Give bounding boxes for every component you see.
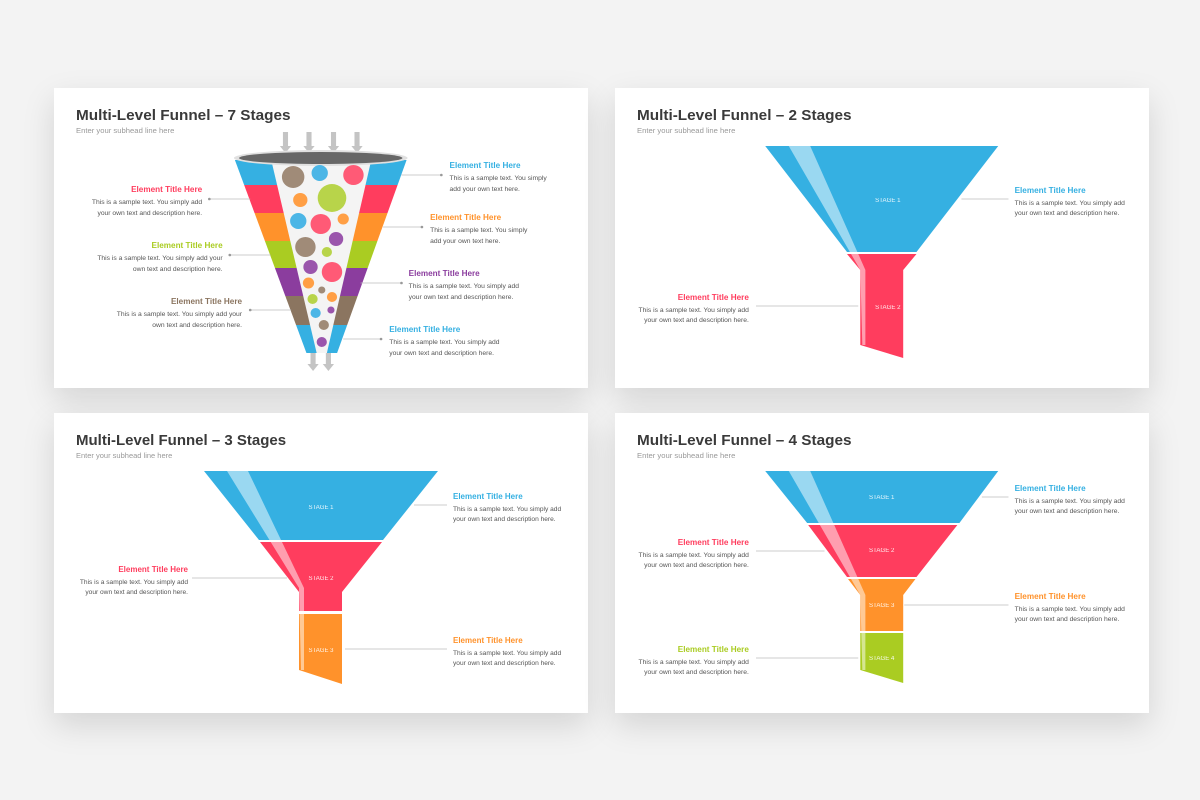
label left 2: Element Title Here — [152, 241, 223, 250]
label left: your own text and description here. — [85, 589, 188, 596]
panel: 2 stages — [615, 88, 1149, 388]
label left 2: your own text and description here. — [644, 669, 749, 676]
label right 4: This is a sample text. You simply add — [389, 339, 500, 346]
funnel 3 stages: STAGE 2 — [309, 576, 334, 582]
label left 2: own text and description here. — [133, 266, 223, 273]
label left 2 — [97, 241, 271, 273]
label left 3: Element Title Here — [171, 297, 243, 306]
label left: your own text and description here. — [644, 317, 749, 324]
title: Multi-Level Funnel – 7 Stages — [76, 107, 291, 124]
label right 1: Element Title Here — [453, 492, 523, 501]
title: Multi-Level Funnel – 4 Stages — [637, 432, 852, 449]
label right 1: add your own text here. — [450, 186, 520, 193]
label right: Element Title Here — [1015, 186, 1086, 195]
label left 1: This is a sample text. You simply add — [92, 199, 202, 206]
label left 1: Element Title Here — [678, 538, 749, 547]
label right 1 — [414, 492, 561, 523]
panel: 4 stages — [615, 413, 1149, 713]
label right 3 — [361, 269, 519, 301]
subhead: Enter your subhead line here — [637, 126, 735, 135]
subhead: Enter your subhead line here — [637, 451, 735, 460]
label right 1: Element Title Here — [450, 161, 521, 170]
label left: This is a sample text. You simply add — [639, 307, 749, 314]
title: Multi-Level Funnel – 3 Stages — [76, 432, 286, 449]
label left 1: Element Title Here — [131, 185, 203, 194]
label right 2: add your own text here. — [430, 238, 501, 245]
label left 2 — [639, 645, 858, 676]
panel: 3 stages — [54, 413, 588, 713]
label left 2: Element Title Here — [678, 645, 749, 654]
label left 3: own text and description here. — [152, 322, 242, 329]
label left 3: This is a sample text. You simply add your — [117, 311, 243, 318]
funnel 4 stages: STAGE 4 — [869, 656, 895, 662]
funnel 3 stages: STAGE 3 — [309, 648, 334, 654]
label right 2: Element Title Here — [430, 213, 502, 222]
label right 3: Element Title Here — [409, 269, 480, 278]
label right 4 — [343, 325, 500, 357]
label left: Element Title Here — [678, 293, 749, 302]
label left 1 — [639, 538, 825, 569]
funnel 2 stages: STAGE 1 — [875, 198, 901, 204]
label right 3: This is a sample text. You simply add — [409, 283, 519, 290]
panel: 7 stages — [54, 88, 588, 388]
funnel 4 stages: STAGE 2 — [869, 548, 895, 554]
label right 1: This is a sample text. You simply add — [1015, 498, 1125, 505]
label left: Element Title Here — [118, 565, 189, 574]
label right 2: This is a sample text. You simply add — [1015, 606, 1125, 613]
label right 1 — [982, 484, 1125, 515]
label right 1: This is a sample text. You simply add — [453, 506, 561, 513]
label left 1 — [92, 185, 250, 217]
funnel 3 stages — [204, 471, 438, 684]
funnel 3 stages: STAGE 1 — [309, 505, 334, 511]
label right 2 — [345, 636, 561, 667]
label right 2: This is a sample text. You simply — [430, 227, 528, 234]
funnel 4 stages: STAGE 3 — [869, 603, 895, 609]
label right 1: your own text and description here. — [453, 516, 556, 523]
label right: your own text and description here. — [1015, 210, 1119, 217]
label left — [80, 565, 287, 596]
subhead: Enter your subhead line here — [76, 126, 174, 135]
label right 1: Element Title Here — [1015, 484, 1086, 493]
label right 2: your own text and description here. — [453, 660, 556, 667]
label right 2: Element Title Here — [453, 636, 523, 645]
label left 1: your own text and description here. — [644, 562, 749, 569]
label right 1: This is a sample text. You simply — [450, 175, 547, 182]
label left 2: This is a sample text. You simply add — [639, 659, 749, 666]
label right 4: Element Title Here — [389, 325, 461, 334]
funnel 7 stages — [228, 150, 412, 355]
label left — [639, 293, 858, 324]
icon: output arrows — [307, 353, 334, 371]
label left 1: This is a sample text. You simply add — [639, 552, 749, 559]
label right — [961, 186, 1125, 217]
label right 3: your own text and description here. — [409, 294, 514, 301]
icon: input arrows — [280, 132, 363, 153]
label right 2 — [383, 213, 528, 245]
label left: This is a sample text. You simply add — [80, 579, 188, 586]
label right 2: This is a sample text. You simply add — [453, 650, 561, 657]
label left 3 — [117, 297, 291, 329]
funnel 2 stages: STAGE 2 — [875, 305, 901, 311]
label right 2: Element Title Here — [1015, 592, 1086, 601]
funnel 2 stages — [765, 146, 998, 358]
label right 4: your own text and description here. — [389, 350, 494, 357]
title: Multi-Level Funnel – 2 Stages — [637, 107, 852, 124]
label right 2: your own text and description here. — [1015, 616, 1119, 623]
label left 1: your own text and description here. — [97, 210, 202, 217]
funnel 4 stages — [765, 471, 998, 683]
funnel 4 stages: STAGE 1 — [869, 495, 895, 501]
label right 1: your own text and description here. — [1015, 508, 1119, 515]
label right: This is a sample text. You simply add — [1015, 200, 1125, 207]
label right 1 — [401, 161, 547, 193]
subhead: Enter your subhead line here — [76, 451, 172, 460]
label left 2: This is a sample text. You simply add your — [97, 255, 223, 262]
label right 2 — [904, 592, 1125, 623]
